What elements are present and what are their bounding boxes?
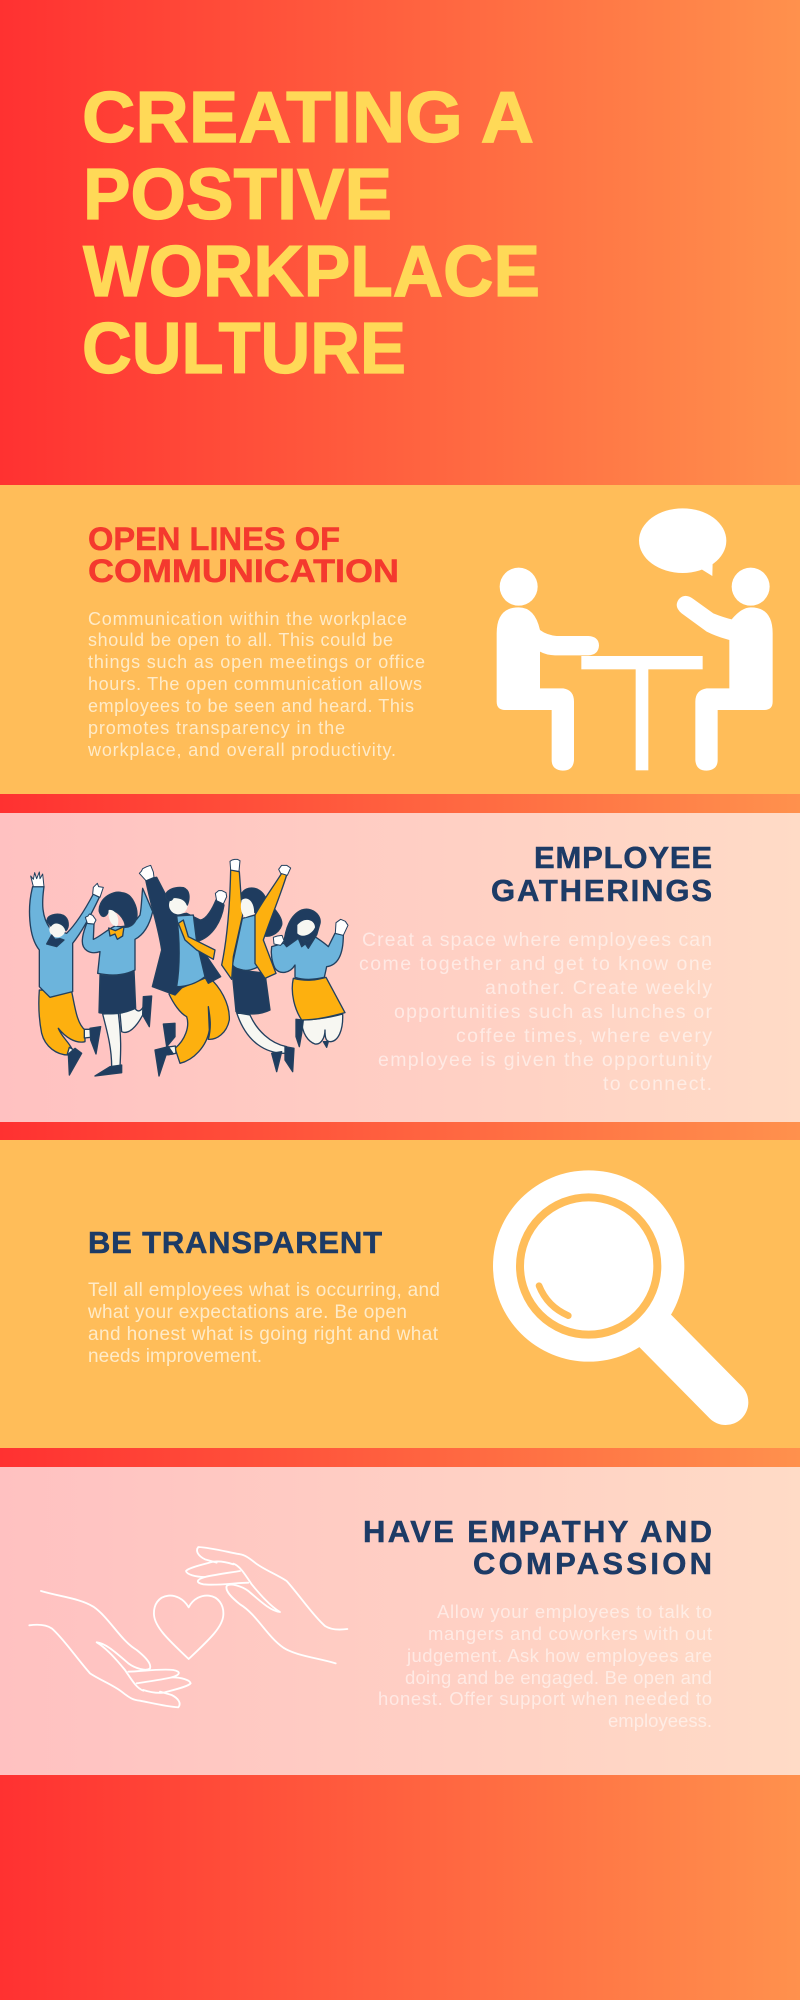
person 3: [139, 865, 229, 1076]
icon: magnifying glass: [493, 1170, 726, 1402]
body text: communication: employees to be seen and heard. This: [88, 696, 414, 716]
body text: transparency: needs improvement.: [88, 1346, 262, 1367]
person 4: [222, 859, 294, 1072]
person 5: [271, 909, 348, 1047]
body text: transparency: Tell all employees what is occurring, and: [88, 1280, 440, 1301]
heading: empathy and compassion: [363, 1514, 712, 1581]
panel: open lines of communication: [0, 485, 800, 794]
body text: communication: should be open to all. This could be: [88, 630, 393, 650]
body text: communication: promotes transparency in the: [88, 718, 345, 738]
body text: empathy: honest. Offer support when needed to: [378, 1688, 712, 1709]
body text: gatherings: another. Create weekly: [485, 977, 712, 999]
heading: employee gatherings: EMPLOYEE: [534, 840, 712, 875]
body text: empathy: Allow your employees to talk to: [437, 1601, 712, 1622]
icon: two people talking at a table: [497, 508, 773, 771]
title: CREATING A: [82, 78, 534, 158]
body text: gatherings: Creat a space where employees can: [362, 929, 712, 951]
body text: transparency: [87, 1280, 440, 1367]
body text: transparency: and honest what is going right and what: [88, 1324, 439, 1345]
panel: have empathy and compassion: [0, 1467, 800, 1775]
heading: empathy and compassion: HAVE EMPATHY AND: [363, 1514, 712, 1549]
panel: employee gatherings: [0, 813, 800, 1122]
right hand: [186, 1547, 347, 1663]
heading: employee gatherings: GATHERINGS: [491, 873, 712, 908]
heading: be transparent: BE TRANSPARENT: [88, 1225, 382, 1260]
illustration: hands holding a heart: [29, 1547, 347, 1707]
body text: gatherings: come together and get to know one: [359, 953, 712, 975]
illustration: jumping coworkers: [30, 859, 348, 1076]
body text: communication: Communication within the workplace: [88, 609, 407, 629]
panel: be transparent: [0, 1140, 800, 1448]
title: CULTURE: [82, 309, 406, 389]
body text: empathy: doing and be engaged. Be open and: [405, 1667, 712, 1688]
body text: communication: [87, 609, 425, 760]
person 1: [30, 872, 103, 1075]
body text: gatherings: to connect.: [603, 1073, 712, 1095]
heart: [154, 1596, 223, 1659]
body text: gatherings: opportunities such as lunches or: [394, 1001, 712, 1023]
body text: transparency: what your expectations are. Be open: [87, 1302, 407, 1323]
heading: open lines of communication: OPEN LINES OF: [88, 521, 340, 557]
left hand: [29, 1591, 191, 1707]
title: WORKPLACE: [83, 232, 540, 312]
body text: communication: things such as open meetings or office: [88, 652, 425, 672]
body text: gatherings: coffee times, where every: [456, 1025, 712, 1047]
body text: empathy: [378, 1601, 712, 1731]
body text: empathy: judgement. Ask how employees are: [406, 1645, 712, 1666]
body text: communication: workplace, and overall productivity.: [87, 740, 396, 760]
heading: open lines of communication: COMMUNICATION: [88, 553, 399, 589]
heading: empathy and compassion: COMPASSION: [473, 1546, 712, 1581]
body text: empathy: mangers and coworkers with out: [428, 1623, 712, 1644]
body text: gatherings: [359, 929, 712, 1095]
heading: open lines of communication: [88, 521, 399, 589]
body text: empathy: employeess.: [608, 1710, 712, 1731]
person 2: [82, 888, 153, 1076]
title: POSTIVE: [83, 155, 392, 235]
body text: gatherings: employee is given the opportunity: [378, 1049, 712, 1071]
body text: communication: hours. The open communication allows: [88, 674, 422, 694]
heading: employee gatherings: [491, 840, 712, 908]
title: [82, 78, 540, 389]
